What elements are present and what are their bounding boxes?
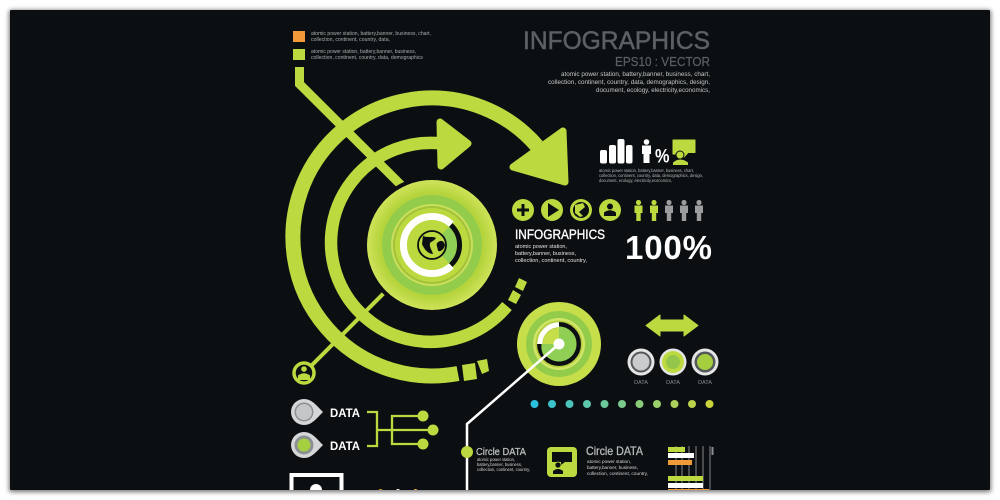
icon: double arrow <box>646 315 698 336</box>
cropped white frame icon and dots <box>290 473 418 490</box>
gradient dot row <box>530 400 714 408</box>
circle data text: atomic power station, <box>477 457 515 462</box>
percent sign: % <box>655 146 670 168</box>
heading block <box>523 27 710 94</box>
icon: white person <box>642 139 651 163</box>
icon: user circle <box>294 363 314 383</box>
subheading with text: collection, continent, country, <box>515 258 587 264</box>
icon: rounded speech square <box>547 447 577 477</box>
heading block: EPS10 : VECTOR <box>615 54 710 69</box>
white leader line with node <box>461 338 564 490</box>
infographic canvas <box>285 31 718 490</box>
circle data text large <box>586 444 648 477</box>
circle data text <box>476 446 530 472</box>
bar chart caption: document, ecology, electricity,economics, <box>599 178 672 183</box>
three data buttons: DATA <box>698 380 712 386</box>
heading block: atomic power station, battery,banner, business, chart, <box>561 71 710 78</box>
heading block: INFOGRAPHICS <box>523 27 710 55</box>
data pills: DATA <box>330 439 360 453</box>
white bar chart icon <box>600 139 632 164</box>
100 percent stat: 100% <box>625 229 712 266</box>
icon: speech bubble with person <box>673 140 695 165</box>
heading block: document, ecology, electricity,economics, <box>596 87 710 94</box>
bar chart caption: collection, continent, country, data, demographics, design, <box>599 173 703 178</box>
three data buttons <box>628 348 718 386</box>
second circle chart <box>514 299 604 389</box>
bar chart caption: atomic power station, battery,banner, business, chart, <box>599 168 694 173</box>
circle data text large: atomic power station, <box>587 459 631 465</box>
data pills: DATA <box>330 406 360 420</box>
main circle with globe <box>363 176 501 314</box>
data pills <box>291 399 360 458</box>
diagonal connector to user icon <box>304 285 392 373</box>
heading block: collection, continent, country, data, demographics, design, <box>548 79 710 86</box>
legend: orange and green keys: atomic power station, battery,banner, business, <box>311 49 416 55</box>
bracket tree diagram <box>367 410 438 450</box>
three data buttons: DATA <box>634 380 648 386</box>
icon: globe <box>418 231 446 259</box>
circle data text: battery,banner, business, <box>477 462 522 467</box>
outer arc arrow <box>293 98 565 381</box>
inner arc arrow <box>331 122 527 342</box>
subheading with text <box>515 227 605 264</box>
circle data text: collection, continent, country, <box>477 467 530 472</box>
legend: orange and green keys: collection, continent, country, data, demographics <box>311 55 424 61</box>
subheading with text: atomic power station, <box>515 244 567 250</box>
legend: orange and green keys: atomic power station, battery,banner, business, chart, <box>311 31 431 37</box>
three data buttons: DATA <box>666 380 680 386</box>
legend: orange and green keys: collection, continent, country, data, <box>311 37 390 43</box>
bar chart caption <box>599 168 703 183</box>
legend: orange and green keys <box>293 31 431 61</box>
people row: two of five highlighted <box>634 200 703 221</box>
subheading with text: battery,banner, business, <box>515 251 576 257</box>
circle data text large: Circle DATA <box>586 444 643 458</box>
subheading with text: INFOGRAPHICS <box>515 227 605 242</box>
circle data text: Circle DATA <box>476 446 526 458</box>
icon row: plus, play, globe, user <box>512 199 621 221</box>
horizontal bar chart, cropped <box>668 446 714 490</box>
circle data text large: collection, continent, country, <box>587 471 648 477</box>
diagonal connector from legend to main circle <box>300 67 410 194</box>
circle data text large: battery,banner, business, <box>587 465 638 471</box>
